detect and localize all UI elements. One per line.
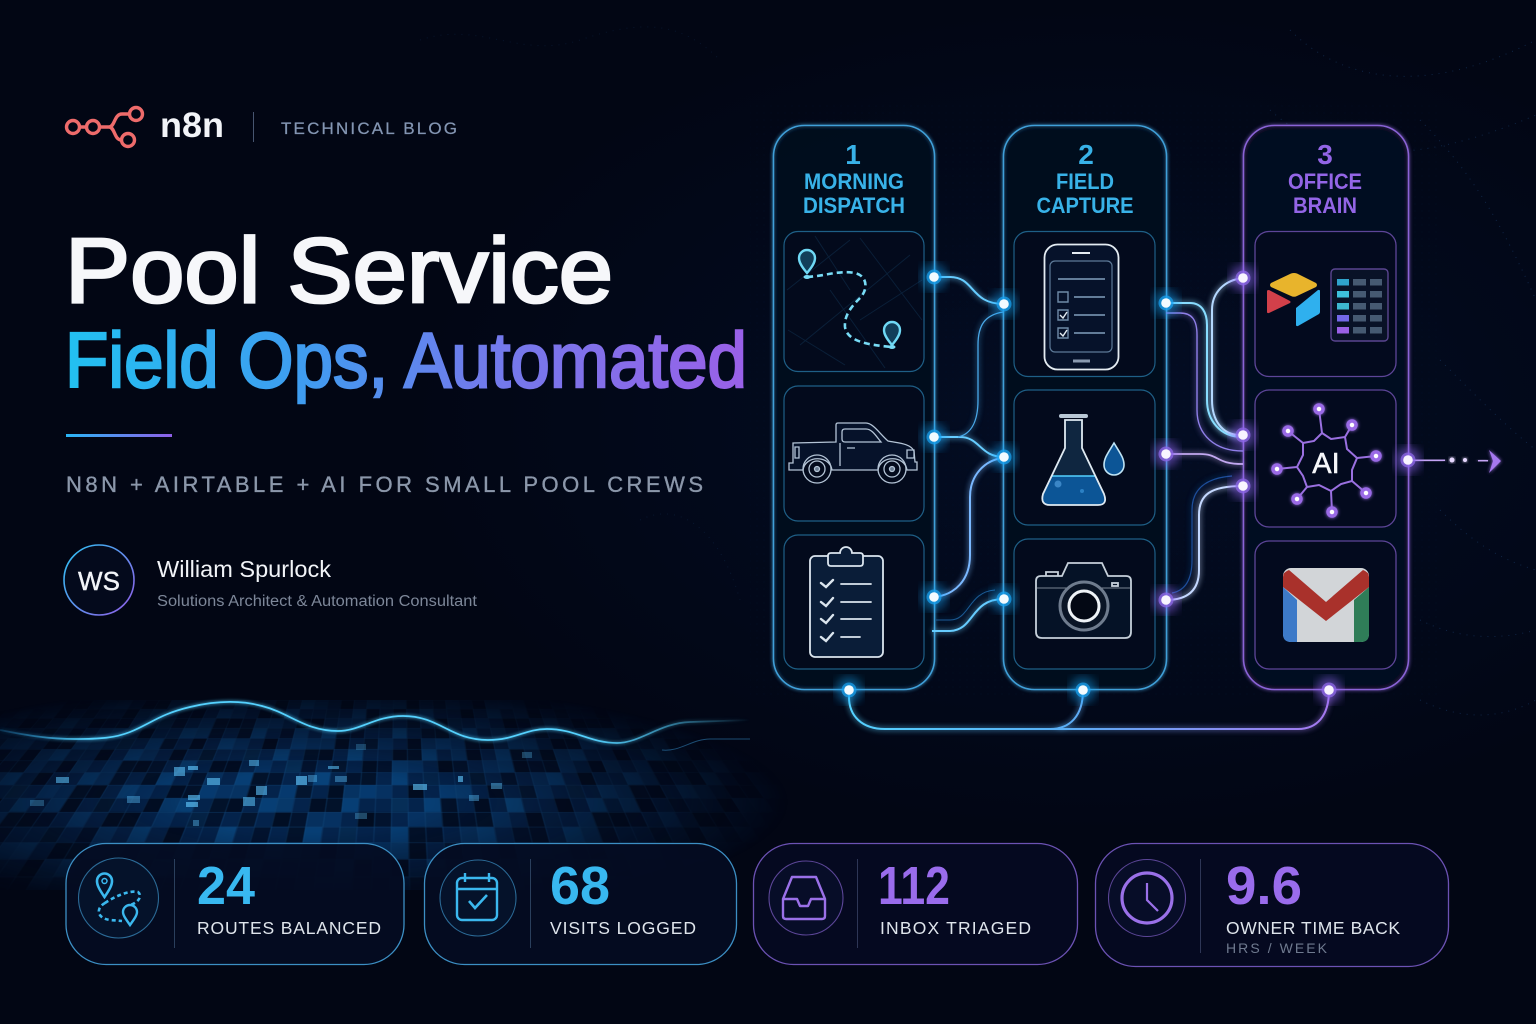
panel: column 2 field capture <box>1004 126 1166 690</box>
background: pixel grid water floor <box>0 700 755 890</box>
output arrow <box>1408 450 1501 473</box>
author <box>64 545 478 615</box>
label: ROUTES BALANCED <box>197 918 381 938</box>
divider <box>1200 859 1201 953</box>
title underline <box>66 434 172 437</box>
icon: n8n nodes <box>66 108 142 146</box>
connector nodes <box>836 264 1421 703</box>
heading: field capture: CAPTURE <box>1036 193 1134 218</box>
divider <box>530 859 531 948</box>
stat card: visits logged <box>424 844 736 964</box>
icon: gmail <box>1283 568 1369 642</box>
stat card: inbox triaged <box>754 844 1078 964</box>
sub-panel: water test flask <box>1014 390 1155 525</box>
icon: truck <box>789 423 917 483</box>
value 9.6: 9.6 <box>1226 856 1302 916</box>
icon: inbox <box>769 861 843 935</box>
background: dotted contours <box>420 27 1536 715</box>
icon: route <box>799 250 900 349</box>
icon: route <box>78 858 158 938</box>
label: INBOX TRIAGED <box>880 918 1031 938</box>
heading: morning dispatch: DISPATCH <box>803 193 905 218</box>
logo: n8n <box>66 106 457 146</box>
connectors: column 2 to column 3 <box>1166 278 1243 600</box>
icon: calendar <box>440 860 516 936</box>
title: Pool Service <box>65 220 613 322</box>
sub-panel: airtable <box>1255 232 1396 376</box>
icon: AI network <box>1273 405 1380 516</box>
label: OWNER TIME BACK <box>1226 918 1400 938</box>
icon: clock <box>1108 860 1186 936</box>
value 112: 112 <box>878 856 950 916</box>
icon: flask and drop <box>1042 414 1124 505</box>
sub label: HRS / WEEK <box>1226 940 1328 956</box>
sub-panel: phone <box>1014 232 1155 376</box>
brand name: n8n <box>160 106 224 145</box>
heading: field capture: 2 <box>1078 139 1094 170</box>
sub-panel: gmail <box>1255 541 1396 669</box>
icon: airtable logo <box>1267 273 1320 326</box>
heading: morning dispatch: 1 <box>845 139 861 170</box>
sub-panel: route map <box>784 232 924 372</box>
panel: column 1 morning dispatch <box>774 126 934 690</box>
author role: Solutions Architect & Automation Consultant <box>157 593 478 610</box>
icon: clipboard <box>810 547 883 657</box>
heading: office brain <box>1288 139 1362 218</box>
connectors: column 1 to column 2 <box>932 277 1004 631</box>
heading: field capture: FIELD <box>1056 169 1114 194</box>
author name: William Spurlock <box>157 556 332 582</box>
AI label: AI <box>1312 448 1340 480</box>
title: Field Ops, Automated <box>65 316 747 404</box>
title <box>65 220 747 404</box>
sub-panel: checklist <box>784 535 924 669</box>
label: VISITS LOGGED <box>550 918 696 938</box>
icon: camera <box>1036 563 1131 638</box>
value 68: 68 <box>550 856 610 916</box>
value 24: 24 <box>197 856 255 916</box>
avatar <box>64 545 134 615</box>
heading: office brain: 3 <box>1317 139 1333 170</box>
divider and tag: TECHNICAL BLOG <box>281 119 457 138</box>
heading: office brain: OFFICE <box>1288 169 1362 194</box>
wave glow line <box>0 702 750 750</box>
avatar: WS <box>78 566 120 596</box>
panel: column 3 office brain <box>1244 126 1408 690</box>
heading: morning dispatch <box>803 139 905 218</box>
sub-panel: AI <box>1255 390 1396 527</box>
connector: bottom bus <box>849 690 1329 729</box>
icon: phone checklist <box>1044 244 1118 370</box>
stat card: routes balanced <box>66 844 404 964</box>
heading: field capture <box>1036 139 1134 218</box>
divider <box>857 859 858 948</box>
subtitle: N8N + AIRTABLE + AI FOR SMALL POOL CREWS <box>66 472 703 497</box>
heading: morning dispatch: MORNING <box>804 169 904 194</box>
sub-panel: pickup truck <box>784 386 924 521</box>
stat card: owner time back <box>1096 844 1448 966</box>
sub-panel: camera <box>1014 539 1155 669</box>
heading: office brain: BRAIN <box>1293 193 1357 218</box>
grid floor highlighted tiles <box>30 744 532 826</box>
icon: data table <box>1331 269 1388 341</box>
divider <box>174 859 175 948</box>
